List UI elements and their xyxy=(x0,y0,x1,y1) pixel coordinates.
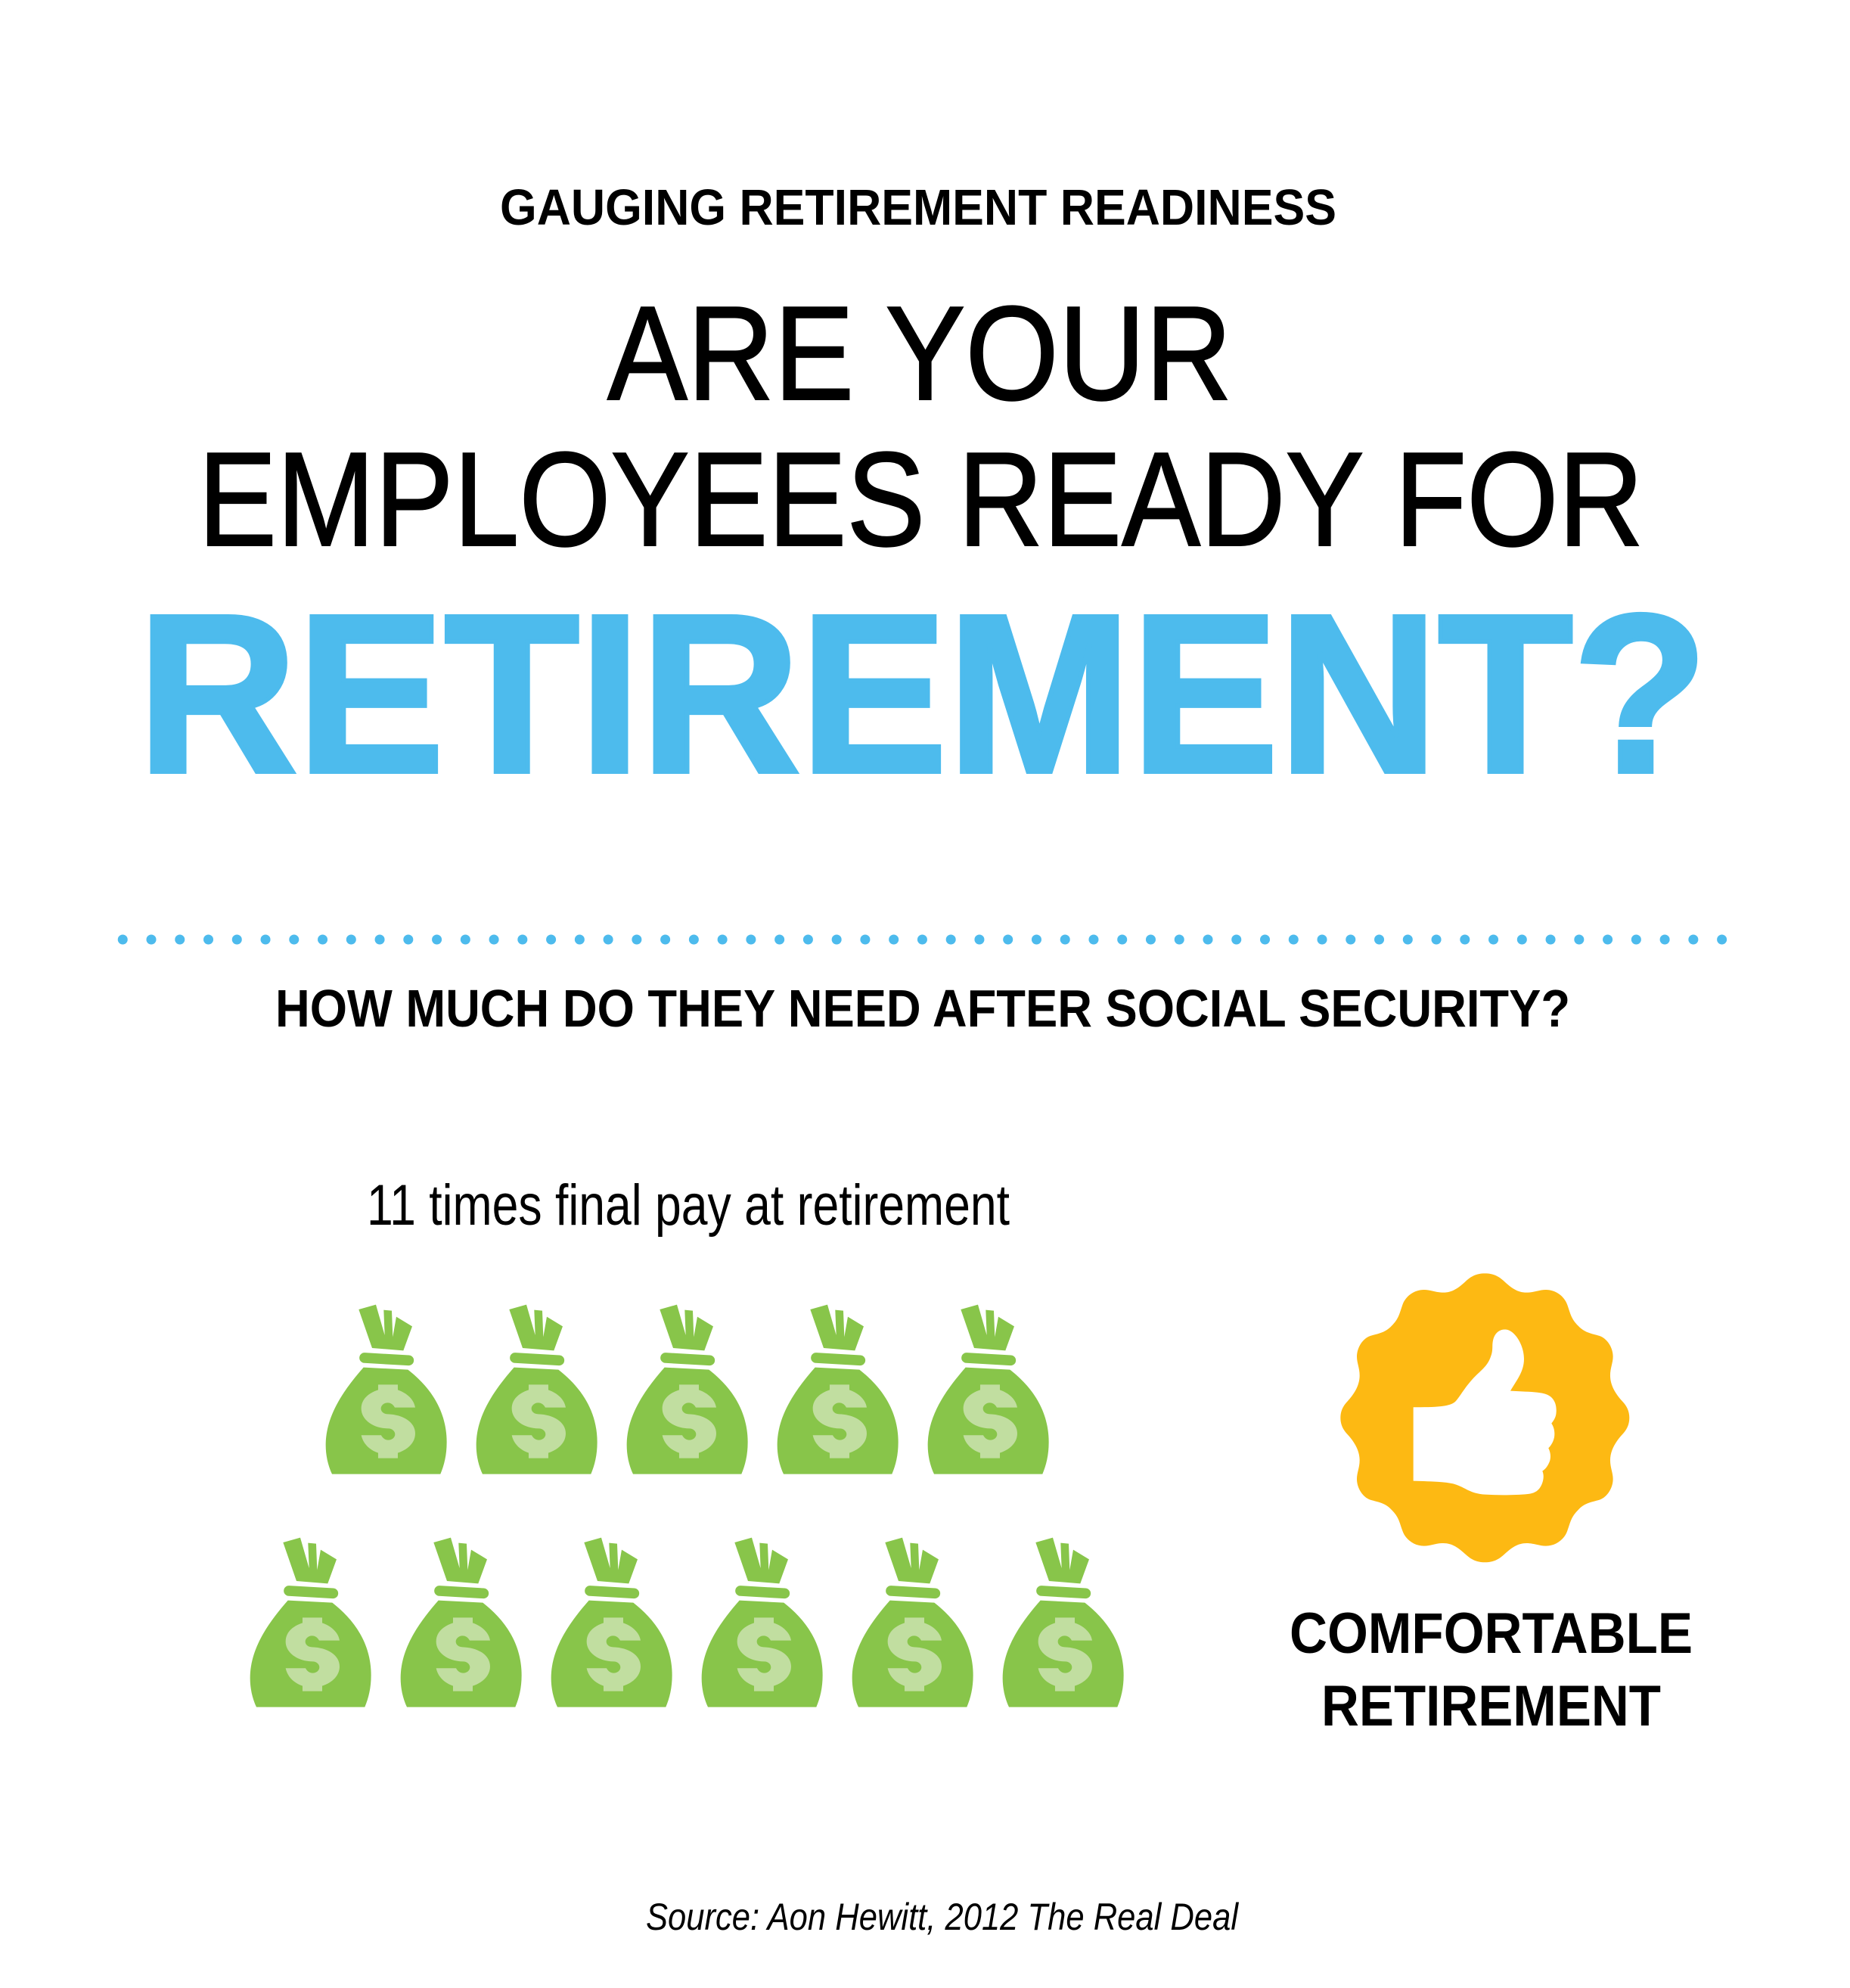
icon: money bag row 1 no. 5 xyxy=(928,1305,1049,1474)
title line 2: EMPLOYEES READY FOR xyxy=(198,424,1644,574)
section question heading: HOW MUCH DO THEY NEED AFTER SOCIAL SECURITY? xyxy=(275,979,1570,1038)
source note: Source: Aon Hewitt, 2012 The Real Deal xyxy=(646,1896,1240,1938)
savings target label: 11 times final pay at retirement xyxy=(367,1173,1010,1238)
icon: money bag row 2 no. 6 xyxy=(1003,1538,1124,1707)
money bags: eleven icons in two rows xyxy=(250,1305,1124,1707)
icon: money bag row 1 no. 2 xyxy=(476,1305,598,1474)
verdict line 2: RETIREMENT xyxy=(1321,1674,1661,1738)
icon: money bag row 1 no. 3 xyxy=(627,1305,748,1474)
verdict label xyxy=(1290,1601,1693,1738)
icon: money bag row 2 no. 5 xyxy=(852,1538,973,1707)
dotted divider xyxy=(118,935,1727,944)
icon: money bag row 2 no. 3 xyxy=(551,1538,672,1707)
badge scalloped shape xyxy=(1340,1273,1629,1562)
title line 1: ARE YOUR xyxy=(607,278,1232,428)
icon: money bag row 2 no. 1 xyxy=(250,1538,371,1707)
thumb hand xyxy=(1414,1329,1557,1495)
icon: money bag row 2 no. 4 xyxy=(702,1538,823,1707)
title line 3: highlighted word: RETIREMENT? xyxy=(138,568,1708,820)
title xyxy=(138,278,1708,820)
kicker heading: GAUGING RETIREMENT READINESS xyxy=(500,179,1336,236)
icon: money bag row 2 no. 2 xyxy=(401,1538,522,1707)
icon: money bag row 1 no. 1 xyxy=(326,1305,447,1474)
icon: money bag row 1 no. 4 xyxy=(778,1305,899,1474)
icon: thumbs-up badge xyxy=(1340,1273,1629,1562)
verdict line 1: COMFORTABLE xyxy=(1290,1601,1693,1666)
